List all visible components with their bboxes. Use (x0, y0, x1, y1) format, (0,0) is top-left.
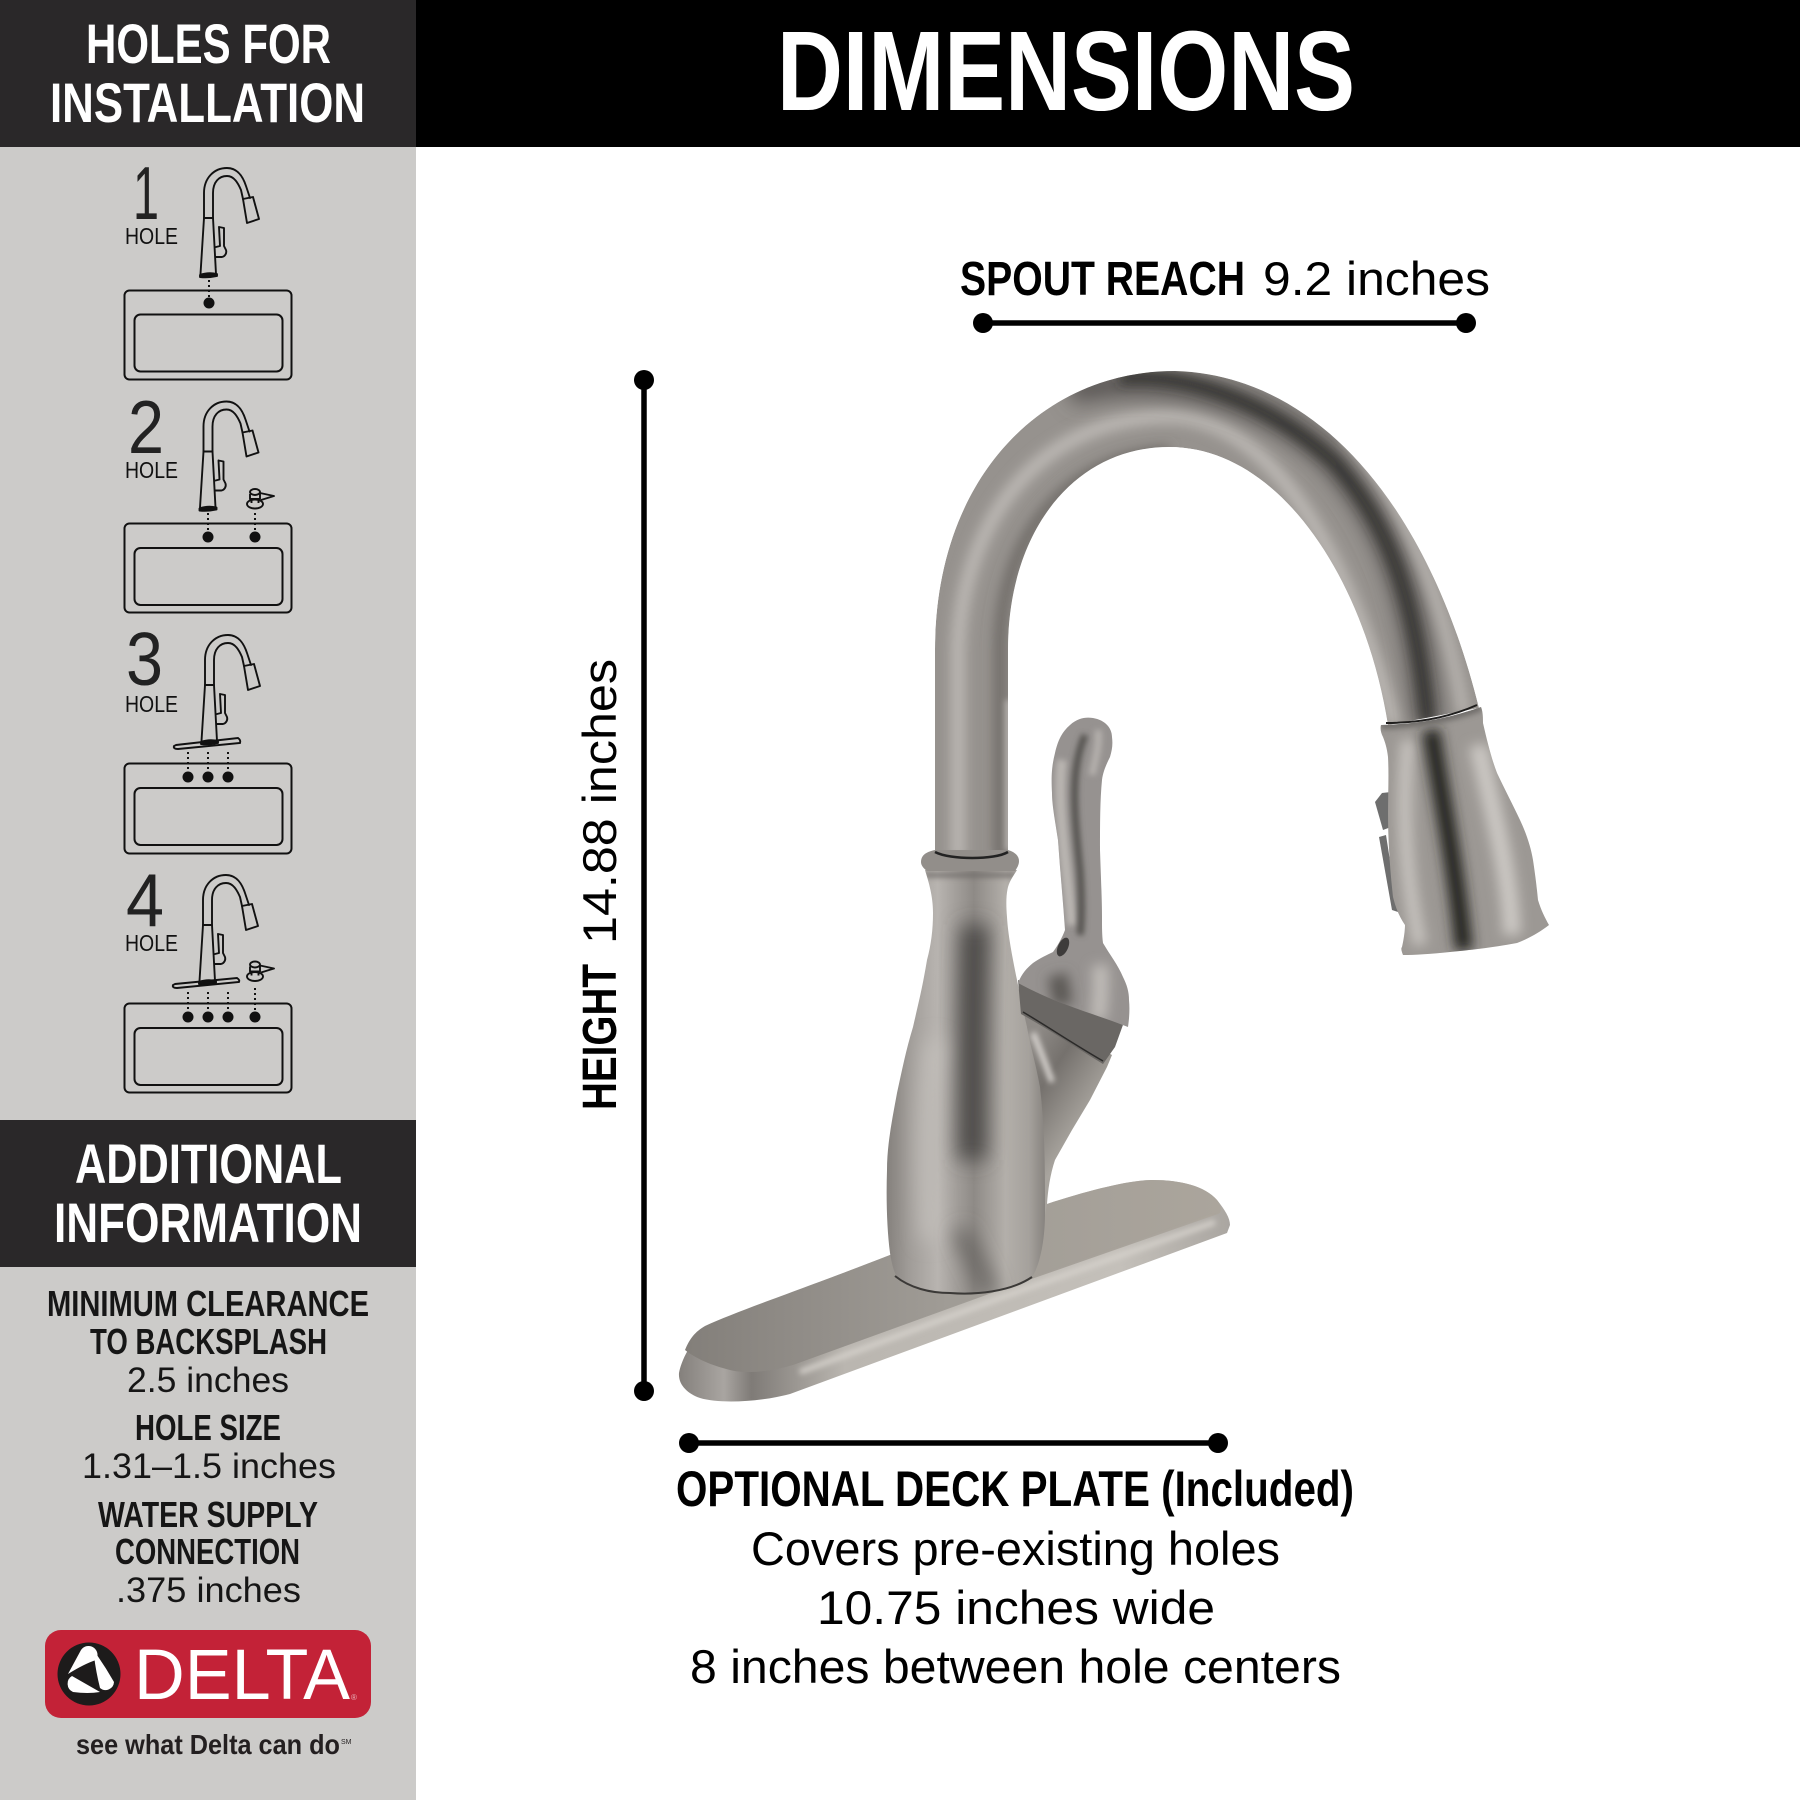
handle (1018, 718, 1130, 1064)
logo: Delta: DELTA (134, 1636, 351, 1715)
text block: minimum clearance (47, 1283, 369, 1400)
text block: optional deck plate: 10.75 inches wide (817, 1581, 1215, 1634)
panel: 1 hole option: HOLE (125, 223, 178, 249)
panel: 3 hole option: 3 (126, 617, 163, 701)
panel: 2 hole option: HOLE (125, 457, 178, 483)
faucet photo (679, 371, 1555, 1401)
text block: minimum clearance: MINIMUM CLEARANCE (47, 1283, 369, 1324)
heading: additional information: INFORMATION (54, 1191, 362, 1254)
spout (935, 371, 1479, 860)
text block: water supply connection: .375 inches (116, 1571, 301, 1610)
panel: 3 hole option: HOLE (125, 691, 178, 717)
text block: optional deck plate: Covers pre-existing holes (751, 1522, 1280, 1575)
deck plate (679, 1180, 1230, 1401)
title: DIMENSIONS (777, 8, 1355, 134)
text block: optional deck plate (676, 1461, 1354, 1693)
text block: hole size (82, 1407, 336, 1486)
panel: 2 hole option: 2 (128, 385, 164, 469)
heading: additional information: ADDITIONAL (75, 1132, 342, 1195)
text block: optional deck plate: OPTIONAL DECK PLATE (Included) (676, 1461, 1354, 1517)
heading: height: 14.88 inches (573, 659, 626, 944)
banner: dimensions title (416, 0, 1800, 147)
panel: 3 hole option (124, 617, 292, 854)
heading: height: HEIGHT (574, 964, 627, 1110)
logo: Delta: ® (351, 1693, 357, 1702)
heading: holes for installation (0, 0, 416, 147)
dimension line: spout reach (973, 313, 1476, 333)
dimension line: height (634, 370, 654, 1401)
panel: 1 hole option (124, 151, 292, 380)
panel: 4 hole option: HOLE (125, 930, 178, 956)
spray head (1375, 700, 1555, 960)
heading: holes for installation: HOLES FOR (86, 12, 331, 75)
panel: 2 hole option (124, 385, 292, 612)
panel: 1 hole option: 1 (133, 151, 159, 235)
logo: Delta (45, 1630, 371, 1718)
heading: height (573, 659, 627, 1110)
heading: holes for installation: INSTALLATION (50, 71, 365, 134)
faucet body (880, 850, 1112, 1300)
text block: water supply connection (98, 1494, 318, 1610)
text block: optional deck plate: 8 inches between hole centers (690, 1640, 1341, 1693)
text block: hole size: 1.31–1.5 inches (82, 1447, 336, 1486)
heading: spout reach: 9.2 inches (1263, 252, 1490, 305)
dimension line: deck plate (679, 1433, 1228, 1453)
text block: water supply connection: WATER SUPPLY (98, 1494, 318, 1535)
heading: spout reach (960, 252, 1490, 306)
text block: minimum clearance: 2.5 inches (127, 1361, 289, 1400)
tagline: see what Delta can do (76, 1729, 340, 1760)
heading: spout reach: SPOUT REACH (960, 253, 1245, 306)
panel: 4 hole option (124, 858, 292, 1092)
panel: left sidebar (0, 0, 416, 1800)
heading: additional information (0, 1120, 416, 1267)
text block: minimum clearance: TO BACKSPLASH (90, 1321, 327, 1362)
tagline: SM (341, 1739, 352, 1746)
panel: 4 hole option: 4 (126, 858, 164, 942)
text block: water supply connection: CONNECTION (115, 1531, 300, 1572)
text block: hole size: HOLE SIZE (135, 1407, 281, 1448)
